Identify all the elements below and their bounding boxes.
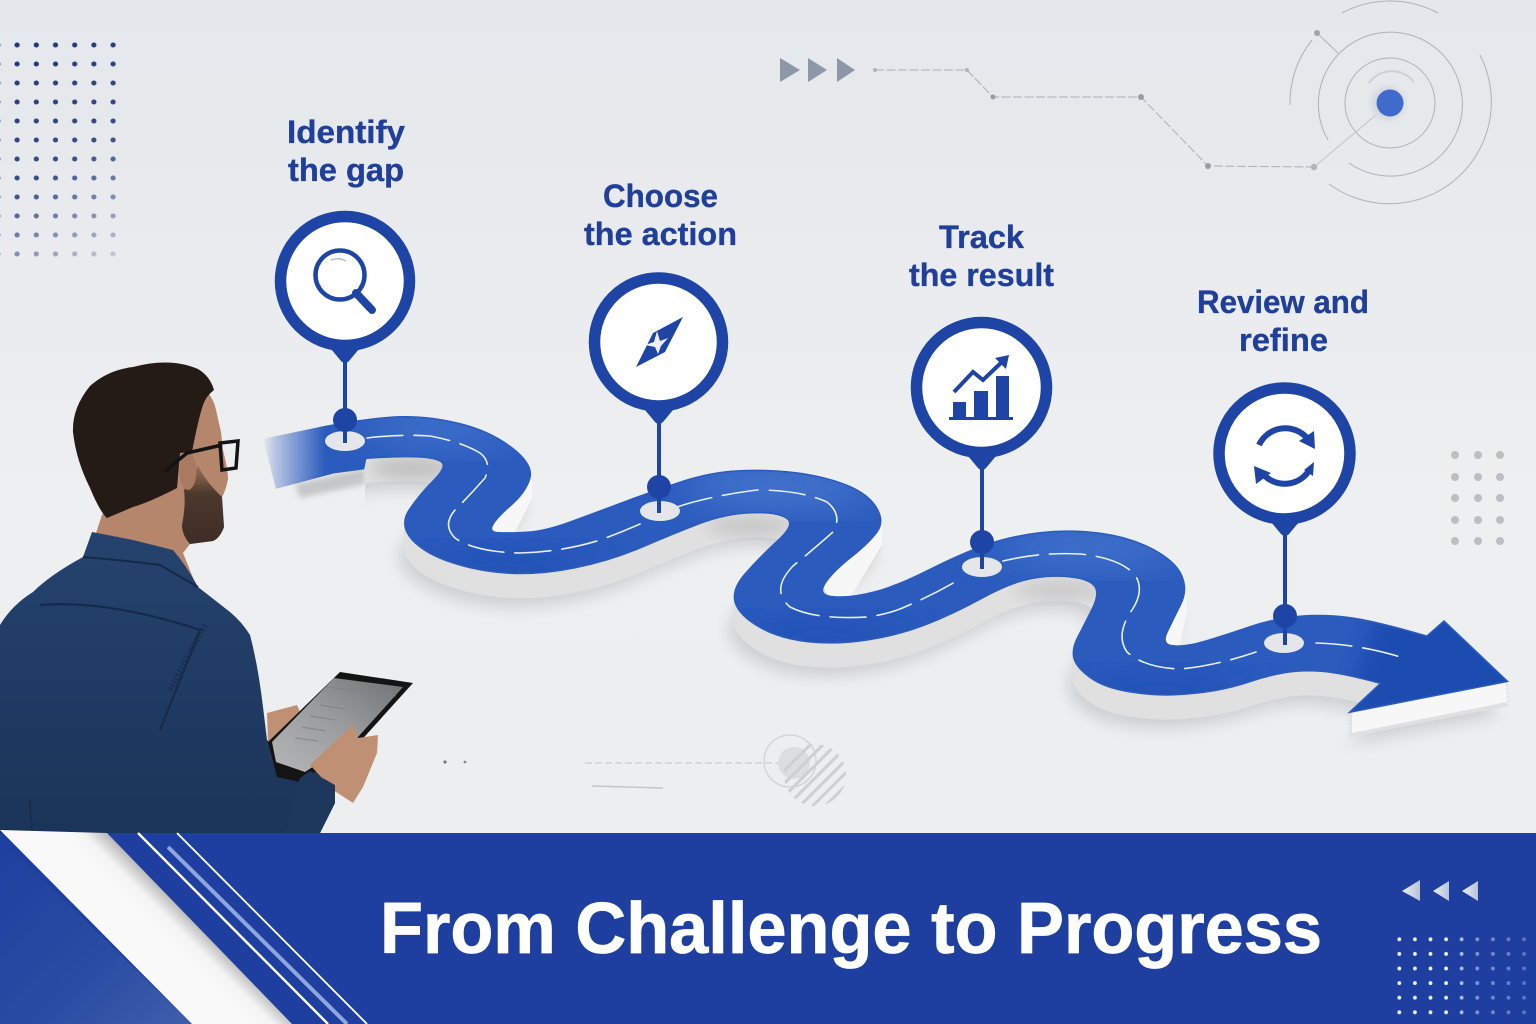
pin marker 4 bbox=[1219, 388, 1350, 653]
stub shadow bbox=[295, 468, 365, 498]
label: review and refine: refine bbox=[1239, 322, 1328, 358]
white wall faces bbox=[490, 476, 1507, 733]
corner triangle bbox=[0, 838, 192, 1024]
pin 3: track the result bbox=[909, 219, 1054, 577]
label: identify the gap bbox=[287, 114, 405, 188]
label: review and refine bbox=[1197, 284, 1369, 358]
shirt cuff bbox=[285, 771, 335, 833]
road top surface bbox=[265, 407, 1520, 720]
label: choose the action: Choose bbox=[603, 178, 718, 214]
icon: refresh arrows bbox=[1254, 428, 1315, 484]
right hand bbox=[310, 725, 378, 803]
shirt bbox=[0, 532, 335, 833]
icon: rising bar chart bbox=[949, 355, 1013, 420]
road centre dashes bbox=[367, 435, 1407, 669]
shirt collar and seams bbox=[30, 557, 205, 833]
pin 2: choose the action bbox=[584, 178, 737, 521]
pin 1: identify the gap bbox=[280, 114, 410, 451]
icon: magnifying glass bbox=[316, 250, 372, 310]
tablet bbox=[268, 672, 413, 782]
label: track the result bbox=[909, 219, 1054, 293]
banner background bbox=[0, 833, 1536, 1024]
pin 4: review and refine bbox=[1197, 284, 1369, 653]
label: choose the action bbox=[584, 178, 737, 252]
pin marker 2 bbox=[594, 278, 722, 521]
decorative arrows: banner bbox=[1402, 880, 1478, 901]
decorative target rings with blue dot bbox=[1290, 1, 1491, 204]
white diagonal band bbox=[0, 830, 292, 1024]
label: track the result: the result bbox=[909, 257, 1054, 293]
decorative dot grid: top left bbox=[0, 42, 116, 256]
diagonal accent lines bbox=[138, 833, 367, 1024]
decorative hatched circles: bottom centre bbox=[443, 735, 846, 806]
decorative dot grid: right bbox=[1451, 451, 1504, 545]
ear bbox=[180, 452, 196, 490]
pin marker 3 bbox=[916, 322, 1046, 577]
label: identify the gap: Identify bbox=[287, 114, 405, 150]
icon: compass needle bbox=[636, 317, 683, 367]
glasses bbox=[165, 441, 238, 471]
decorative dashed connector bbox=[873, 68, 1317, 170]
title: From Challenge to Progress bbox=[380, 889, 1322, 969]
label: choose the action: the action bbox=[584, 216, 737, 252]
road side wall bbox=[365, 458, 1509, 738]
label: identify the gap: the gap bbox=[288, 152, 404, 188]
road ground shadow bbox=[365, 482, 1496, 746]
neck and face bbox=[92, 385, 228, 600]
label: review and refine: Review and bbox=[1197, 284, 1369, 320]
left hand bbox=[267, 705, 301, 742]
pin marker 1 bbox=[280, 216, 410, 451]
decorative arrows: top centre bbox=[780, 58, 855, 82]
beard bbox=[182, 466, 224, 544]
decorative dot grid: banner bbox=[1397, 937, 1526, 1014]
hair bbox=[73, 362, 214, 518]
bottom banner bbox=[0, 830, 1536, 1024]
person with tablet bbox=[0, 362, 413, 833]
winding road with arrowhead bbox=[259, 407, 1520, 745]
label: track the result: Track bbox=[939, 219, 1024, 255]
